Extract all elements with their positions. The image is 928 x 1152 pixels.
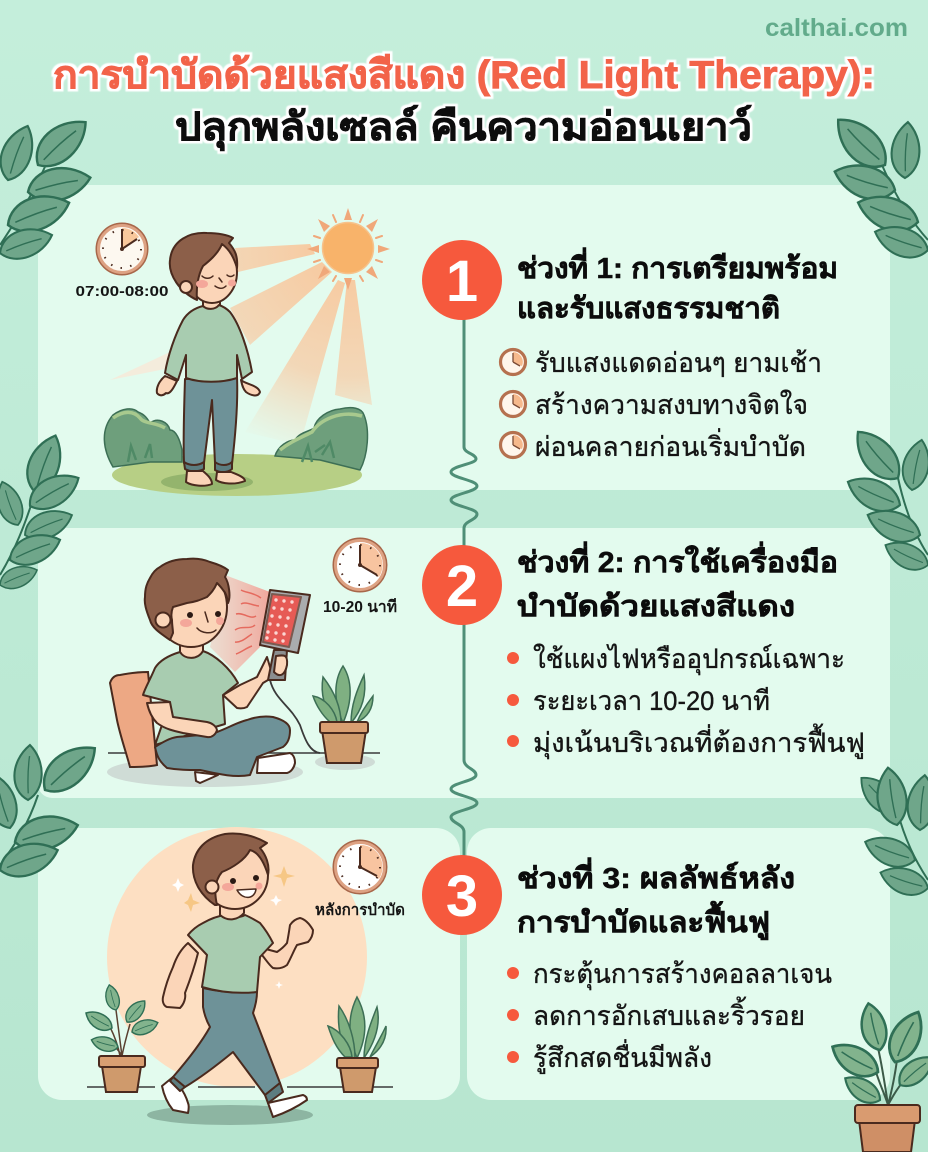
panel: stage 3 text background	[467, 828, 890, 1100]
sun	[307, 208, 390, 290]
panel: stage 2 background	[38, 528, 890, 798]
peach sun circle	[107, 827, 367, 1087]
pillow	[110, 672, 157, 767]
sun rays	[230, 244, 372, 445]
sparkles	[184, 866, 295, 912]
stage 1 heading	[517, 247, 838, 325]
foliage: top left branch	[0, 110, 96, 265]
clock 10-20 minutes	[323, 538, 397, 616]
panel: stage 1 background	[38, 185, 890, 490]
stage 2 bullet list: มุ่งเน้นบริเวณที่ต้องการฟื้นฟู	[533, 723, 865, 760]
stage 3 heading	[517, 857, 795, 940]
stage 3 heading: ช่วงที่ 3: ผลลัพธ์หลัง	[517, 857, 795, 895]
person 2	[143, 559, 295, 783]
person 3	[162, 833, 313, 1117]
stage 1 heading: และรับแสงธรรมชาติ	[517, 293, 780, 325]
plant right	[328, 997, 386, 1092]
title: การบำบัดด้วยแสงสีแดง (Red Light Therapy):	[53, 54, 875, 97]
brand label: calthai.com	[765, 14, 908, 42]
stage 1 illustration	[104, 208, 390, 496]
stage 2 bullet list	[507, 643, 865, 760]
stage 3 bullet list	[507, 959, 832, 1074]
plant left	[82, 983, 160, 1092]
clock 07:00-08:00	[76, 224, 168, 300]
stage 3 bullet list: รู้สึกสดชื่นมีพลัง	[533, 1039, 712, 1074]
foliage: middle right branch	[842, 423, 928, 576]
foliage: lower right branch	[852, 766, 928, 900]
stage 2 heading: บำบัดด้วยแสงสีแดง	[517, 591, 795, 623]
stage 1 bullet list	[500, 348, 822, 462]
bushes	[104, 409, 182, 467]
title	[53, 54, 875, 151]
title: ปลุกพลังเซลล์ คืนความอ่อนเยาว์	[175, 104, 752, 151]
plant stage 2	[313, 666, 373, 763]
cable	[270, 680, 320, 753]
stage 2 bullet list: ใช้แผงไฟหรืออุปกรณ์เฉพาะ	[533, 643, 845, 676]
stage 2 number badge: 2	[446, 554, 478, 619]
stage 2 bullet list: ระยะเวลา 10-20 นาที	[533, 686, 770, 716]
stage 3 illustration	[82, 827, 393, 1125]
stage 3 bullet list: ลดการอักเสบและริ้วรอย	[533, 996, 805, 1031]
stage 1 bullet list: สร้างความสงบทางจิตใจ	[535, 389, 808, 420]
stage 3 bullet list: กระตุ้นการสร้างคอลลาเจน	[533, 959, 832, 991]
foliage: top right branch	[826, 109, 928, 264]
red light beam	[210, 575, 270, 672]
stage 3 heading: การบำบัดและฟื้นฟู	[517, 900, 770, 940]
clock caption: 10-20 นาที	[323, 597, 397, 616]
stage 2 heading	[517, 541, 838, 623]
stage 1 heading: ช่วงที่ 1: การเตรียมพร้อม	[517, 247, 838, 285]
stage 2 number badge	[422, 545, 502, 625]
stage 1 number badge	[422, 240, 502, 320]
panel: stage 3 illustration background	[38, 828, 460, 1100]
red light device	[260, 590, 310, 680]
stage 2 illustration	[107, 559, 380, 787]
foliage: middle left branch	[0, 430, 85, 594]
stage 3 number badge: 3	[446, 864, 478, 929]
stage 1 bullet list: รับแสงแดดอ่อนๆ ยามเช้า	[535, 348, 822, 378]
stage 2 heading: ช่วงที่ 2: การใช้เครื่องมือ	[517, 541, 838, 579]
stage 3 number badge	[422, 855, 502, 935]
clock caption: หลังการบำบัด	[315, 901, 405, 919]
clock caption: 07:00-08:00	[76, 283, 168, 300]
person 1	[157, 233, 260, 486]
stage 1 number badge: 1	[446, 249, 478, 314]
clock after therapy	[315, 840, 405, 919]
grass tufts	[128, 442, 334, 462]
ground	[112, 454, 362, 496]
corner potted plant	[826, 1001, 928, 1152]
stage 1 bullet list: ผ่อนคลายก่อนเริ่มบำบัด	[535, 428, 806, 462]
foliage: lower left branch	[0, 735, 105, 883]
timeline connector	[451, 315, 477, 860]
